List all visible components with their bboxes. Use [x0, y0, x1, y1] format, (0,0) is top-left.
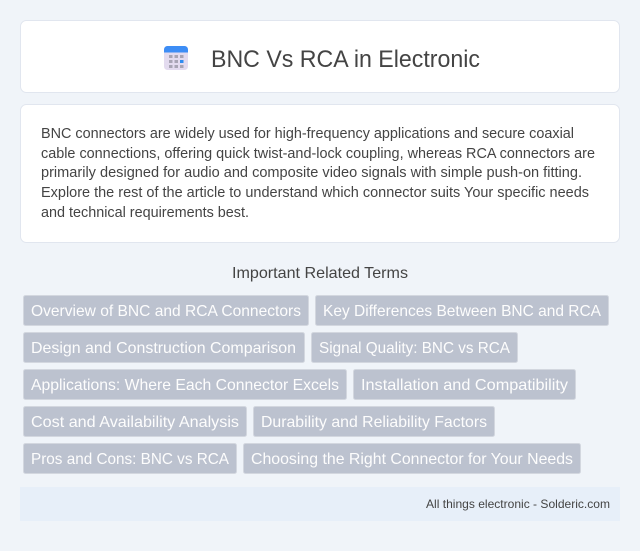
footer bar: All things electronic - Solderic.com [426, 497, 610, 511]
tag [254, 406, 494, 436]
heading: related terms: Important Related Terms [232, 265, 408, 282]
tag: Choosing the Right Connector for Your Needs [251, 451, 573, 468]
tag: Key Differences Between BNC and RCA [323, 303, 601, 320]
tag: Durability and Reliability Factors [261, 414, 487, 431]
tag [354, 370, 576, 400]
tag: Design and Construction Comparison [31, 340, 296, 357]
tag: Installation and Compatibility [361, 377, 568, 394]
tag: Signal Quality: BNC vs RCA [319, 340, 510, 357]
tag [24, 444, 236, 474]
tag: Overview of BNC and RCA Connectors [31, 303, 301, 320]
tag: Cost and Availability Analysis [31, 414, 239, 431]
panel: intro paragraph [20, 104, 620, 242]
panel: intro paragraph: and technical requirements best. [41, 205, 249, 221]
tag [24, 296, 308, 326]
icon: calendar [164, 46, 188, 70]
panel: intro paragraph: primarily designed for audio and composite video signals with simple push-on fitting. [41, 165, 582, 181]
panel: intro paragraph: Explore the rest of the article to understand which connector suits Your specific needs [41, 185, 589, 201]
tag: Pros and Cons: BNC vs RCA [31, 451, 229, 468]
tag [312, 332, 518, 362]
footer bar [20, 487, 620, 521]
tag list [24, 296, 608, 474]
tag [244, 444, 580, 474]
tag [24, 370, 346, 400]
tag [24, 332, 304, 362]
panel: intro paragraph: cable connections, offering quick twist-and-lock coupling, whereas RCA connectors are [41, 146, 595, 162]
tag: Applications: Where Each Connector Excels [31, 377, 339, 394]
title: BNC Vs RCA in Electronic [211, 46, 480, 73]
tag [24, 406, 246, 436]
tag [316, 296, 608, 326]
panel: intro paragraph: BNC connectors are widely used for high-frequency applications and secure coaxial [41, 126, 574, 142]
panel: title card [20, 20, 620, 92]
